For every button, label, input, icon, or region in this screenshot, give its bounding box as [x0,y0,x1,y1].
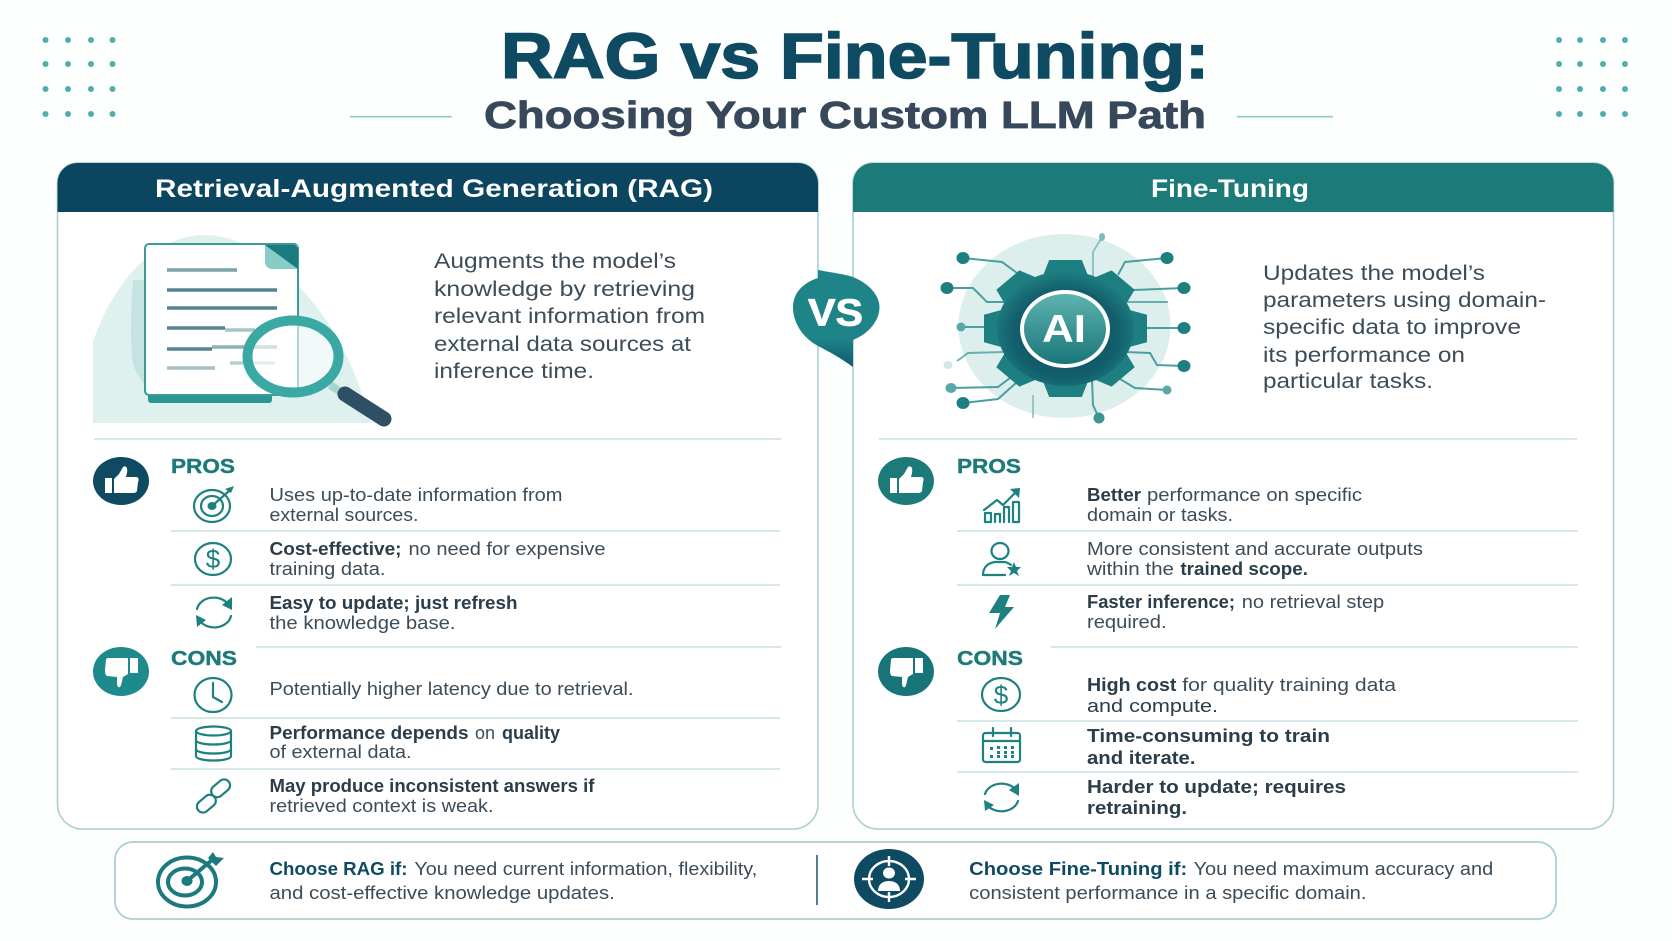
icon: person target [854,849,924,909]
choose RAG text: and cost-effective knowledge updates. [270,883,615,903]
icon: person with star [983,543,1021,576]
icon: link [194,777,233,815]
pro: faster inference [1087,592,1384,632]
choose RAG text: Choose RAG if: [270,859,408,879]
pro: consistent outputs [1086,539,1423,579]
heading: Fine-Tuning: Fine-Tuning [1151,175,1309,203]
VS badge [793,270,880,367]
pro: cost-effective [270,539,606,579]
description: RAG: external data sources at [434,333,691,356]
pro: better performance [1087,485,1362,525]
pro: better performance: Better [1087,485,1141,505]
pro: cost-effective: Cost-effective; [270,539,402,559]
panel: RAG [58,163,818,829]
pro: faster inference: no retrieval step [1242,592,1384,612]
con: time-consuming [1087,726,1330,768]
pro: faster inference: required. [1087,612,1167,632]
heading: PROS (Fine-Tuning): PROS [957,456,1021,478]
description: RAG: Augments the model’s [434,250,676,273]
icon: clock [194,678,232,712]
con: quality: on [475,723,495,743]
choose Fine-Tuning text: Choose Fine-Tuning if: [969,859,1187,879]
icon: lightning bolt [989,595,1014,629]
icon: calendar [983,728,1020,762]
illustration: AI gear with circuits [940,233,1190,424]
con: high cost: and compute. [1087,696,1218,716]
description: Fine-Tuning: specific data to improve [1263,316,1521,339]
description: RAG: knowledge by retrieving [434,278,695,301]
icon: dollar (Fine-Tuning) [982,678,1020,711]
con: inconsistent: retrieved context is weak. [270,796,494,816]
choose Fine-Tuning text [969,859,1493,903]
con: quality: of external data. [270,742,412,762]
panel header: Fine-Tuning [853,163,1614,212]
pro: easy to update: Easy to update; just refresh [270,593,518,613]
choose Fine-Tuning text: You need maximum accuracy and [1194,859,1493,879]
description: Fine-Tuning: particular tasks. [1263,370,1433,393]
heading: PROS (RAG): PROS [171,456,235,478]
description: Fine-Tuning: its performance on [1263,344,1465,367]
icon: growth chart [984,488,1020,522]
pro: faster inference: Faster inference; [1087,592,1235,612]
choose RAG text: You need current information, flexibility, [414,859,757,879]
description: Fine-Tuning: Updates the model’s [1263,262,1485,285]
choose Fine-Tuning text: consistent performance in a specific domain. [969,883,1366,903]
description: Fine-Tuning [1263,262,1546,393]
illustration: document with magnifier [93,235,384,423]
pro: better performance: performance on specific [1147,485,1362,505]
VS badge: VS [808,292,863,334]
con: inconsistent: May produce inconsistent answers if [270,776,596,796]
panel header: RAG [58,163,818,212]
decorative dots right [1556,37,1628,117]
icon: refresh (Fine-Tuning) [984,783,1019,811]
illustration: AI gear with circuits: AI [1042,308,1086,351]
description: Fine-Tuning: parameters using domain- [1263,289,1546,312]
pro: easy to update: the knowledge base. [270,613,456,633]
icon: dollar: $ [206,544,221,574]
icon: dollar (Fine-Tuning): $ [994,680,1009,710]
pro: cost-effective: no need for expensive [408,539,606,559]
pro: up-to-date: Uses up-to-date information from [270,485,562,505]
con: harder to update: retraining. [1087,798,1187,818]
title: RAG vs Fine-Tuning: [501,20,1209,92]
pro: consistent outputs: trained scope. [1180,559,1308,579]
subtitle rules [350,116,1333,118]
con: quality: Performance depends [270,723,468,743]
pro: cost-effective: training data. [270,559,386,579]
icon: target large [158,852,224,906]
choose RAG text [270,859,757,903]
icon: thumbs up (RAG) [93,457,149,505]
con: high cost: High cost [1087,675,1176,695]
icon: thumbs down (RAG) [93,647,149,696]
heading: CONS (Fine-Tuning): CONS [957,648,1023,670]
callout: decision bar [115,842,1556,919]
icon: target [194,486,234,522]
heading: RAG: Retrieval-Augmented Generation (RAG) [155,175,713,203]
con: harder to update [1087,777,1346,818]
con: quality: quality [502,723,560,743]
con: high cost [1087,675,1397,716]
subtitle: Choosing Your Custom LLM Path [484,95,1206,137]
icon: dollar [195,543,231,575]
con: high cost: for quality training data [1182,675,1397,695]
icon: thumbs down (Fine-Tuning) [878,647,934,696]
decorative dots left [42,37,116,117]
icon: refresh [196,597,232,627]
con: time-consuming: Time-consuming to train [1087,726,1330,746]
pro: up-to-date: external sources. [270,505,418,525]
description: RAG [434,250,705,383]
pro: easy to update [270,593,518,633]
con: quality [270,723,560,762]
icon: database [196,726,231,760]
heading: CONS (RAG): CONS [171,648,237,670]
icon: thumbs up (Fine-Tuning) [878,457,934,505]
pro: better performance: domain or tasks. [1087,505,1233,525]
panel: Fine-Tuning [853,163,1614,829]
pro: consistent outputs: within the [1086,559,1174,579]
description: RAG: inference time. [434,360,594,383]
pro: up-to-date [270,485,562,525]
pro: consistent outputs: More consistent and accurate outputs [1087,539,1423,559]
description: RAG: relevant information from [434,305,705,328]
con: time-consuming: and iterate. [1087,748,1196,768]
con: harder to update: Harder to update; requires [1087,777,1346,797]
con: latency: Potentially higher latency due to retrieval. [270,679,634,699]
con: inconsistent [270,776,596,816]
